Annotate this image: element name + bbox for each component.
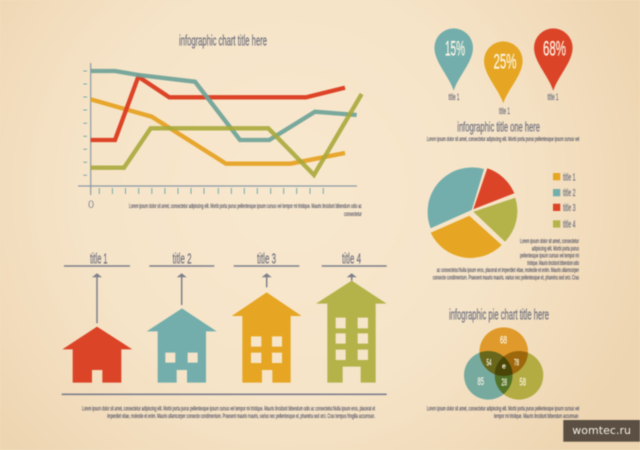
ground line	[62, 393, 387, 395]
venn circle: teal	[464, 351, 513, 400]
panel: houses	[62, 250, 387, 394]
watermark badge	[563, 420, 640, 442]
venn values: 28	[502, 378, 507, 388]
heading: infographic pie chart title: infographic pie chart title here	[449, 308, 549, 324]
line: teal series	[91, 71, 357, 140]
column: title 2: title 2	[172, 250, 192, 268]
column: title 1: title 1	[90, 250, 108, 268]
chart description	[129, 204, 362, 218]
pie description: Lorem ipsum dolor sit amet, consectetur	[520, 239, 579, 245]
pie description: pellentesque ipsum cursus vel tempor mi	[520, 254, 579, 260]
infographic canvas: tristique. Mauris tincidunt bibendum odio	[527, 261, 579, 267]
slice: olive	[473, 198, 517, 242]
venn circle: olive	[495, 351, 543, 400]
line: orange series	[91, 99, 345, 164]
line: red series	[91, 77, 345, 140]
watermark badge: womtec.ru	[572, 424, 631, 437]
houses description: imperdiet vitae, molestie et enim. Mauris ullamcorper consecte condimentum. Praesent mauris mauris, varius nec pellentesque et, pharetra sed orci. Cras tempus fringilla accumsan.	[107, 414, 375, 420]
venn values	[478, 334, 526, 388]
pin: 68 percent: 68%	[543, 38, 566, 60]
houses description: Lorem ipsum dolor sit amet, consectetur adipiscing elit. Morbi porta purus pellentesque ipsum cursus vel tempor mi tristique. Mauris tincidunt bibendum odio ac consectetur.Nulla ipsum eros, placerat et	[82, 406, 375, 412]
pie chart	[428, 167, 517, 258]
line chart	[78, 63, 362, 211]
venn diagram	[464, 327, 543, 400]
venn description	[427, 406, 579, 420]
venn values: e	[502, 364, 506, 370]
venn values: 58	[520, 376, 526, 388]
column: title 3	[232, 250, 302, 383]
pin: 25 percent: title 1	[499, 106, 510, 117]
pin: 68 percent	[534, 28, 573, 103]
pin: 25 percent: 25%	[494, 50, 516, 74]
pie description	[433, 239, 579, 282]
data lines	[91, 71, 362, 175]
pin: 15 percent: 15%	[445, 38, 465, 60]
panel: location pins	[434, 28, 573, 117]
line: olive series	[91, 94, 362, 175]
column: title 4: title 4	[342, 250, 361, 268]
column: title 4	[316, 250, 387, 383]
legend item: title 2: title 2	[563, 187, 576, 199]
pin: 15 percent	[434, 28, 473, 103]
legend item: title 4: title 4	[563, 218, 576, 230]
chart description: consectetur	[344, 212, 362, 218]
chart description: Lorem ipsum dolor sit amet, consectetur adipiscing elit. Morbi porta purus pellentesque ipsum cursus vel tempor mi tristique. Mauris tincidunt bibendum odio ac	[129, 204, 362, 210]
venn circle: orange	[479, 327, 528, 376]
venn values: 78	[514, 358, 519, 368]
column: title 1	[62, 250, 132, 383]
chart axes and ticks	[78, 63, 357, 195]
pie description: adipiscing elit. Morbi porta purus	[532, 246, 579, 252]
slice: orange	[431, 216, 502, 258]
venn values: 54	[486, 358, 492, 368]
pin: 68 percent: title 1	[548, 92, 558, 103]
heading: infographic title one: infographic title one here	[457, 118, 540, 134]
pin: 15 percent: title 1	[448, 92, 460, 103]
line chart title: infographic chart title here	[179, 32, 267, 50]
pin: 25 percent	[484, 41, 523, 117]
legend item: title 3: title 3	[563, 202, 576, 214]
slice: teal	[428, 167, 484, 228]
houses description	[82, 406, 375, 420]
column: title 3: title 3	[257, 250, 276, 268]
venn values: 85	[478, 376, 484, 388]
pie legend	[553, 172, 576, 230]
axis origin label: 0	[88, 199, 94, 211]
legend item: title 1: title 1	[563, 172, 576, 184]
slice: red	[473, 168, 514, 209]
venn values: 68	[500, 334, 507, 346]
column: title 2	[147, 250, 217, 383]
